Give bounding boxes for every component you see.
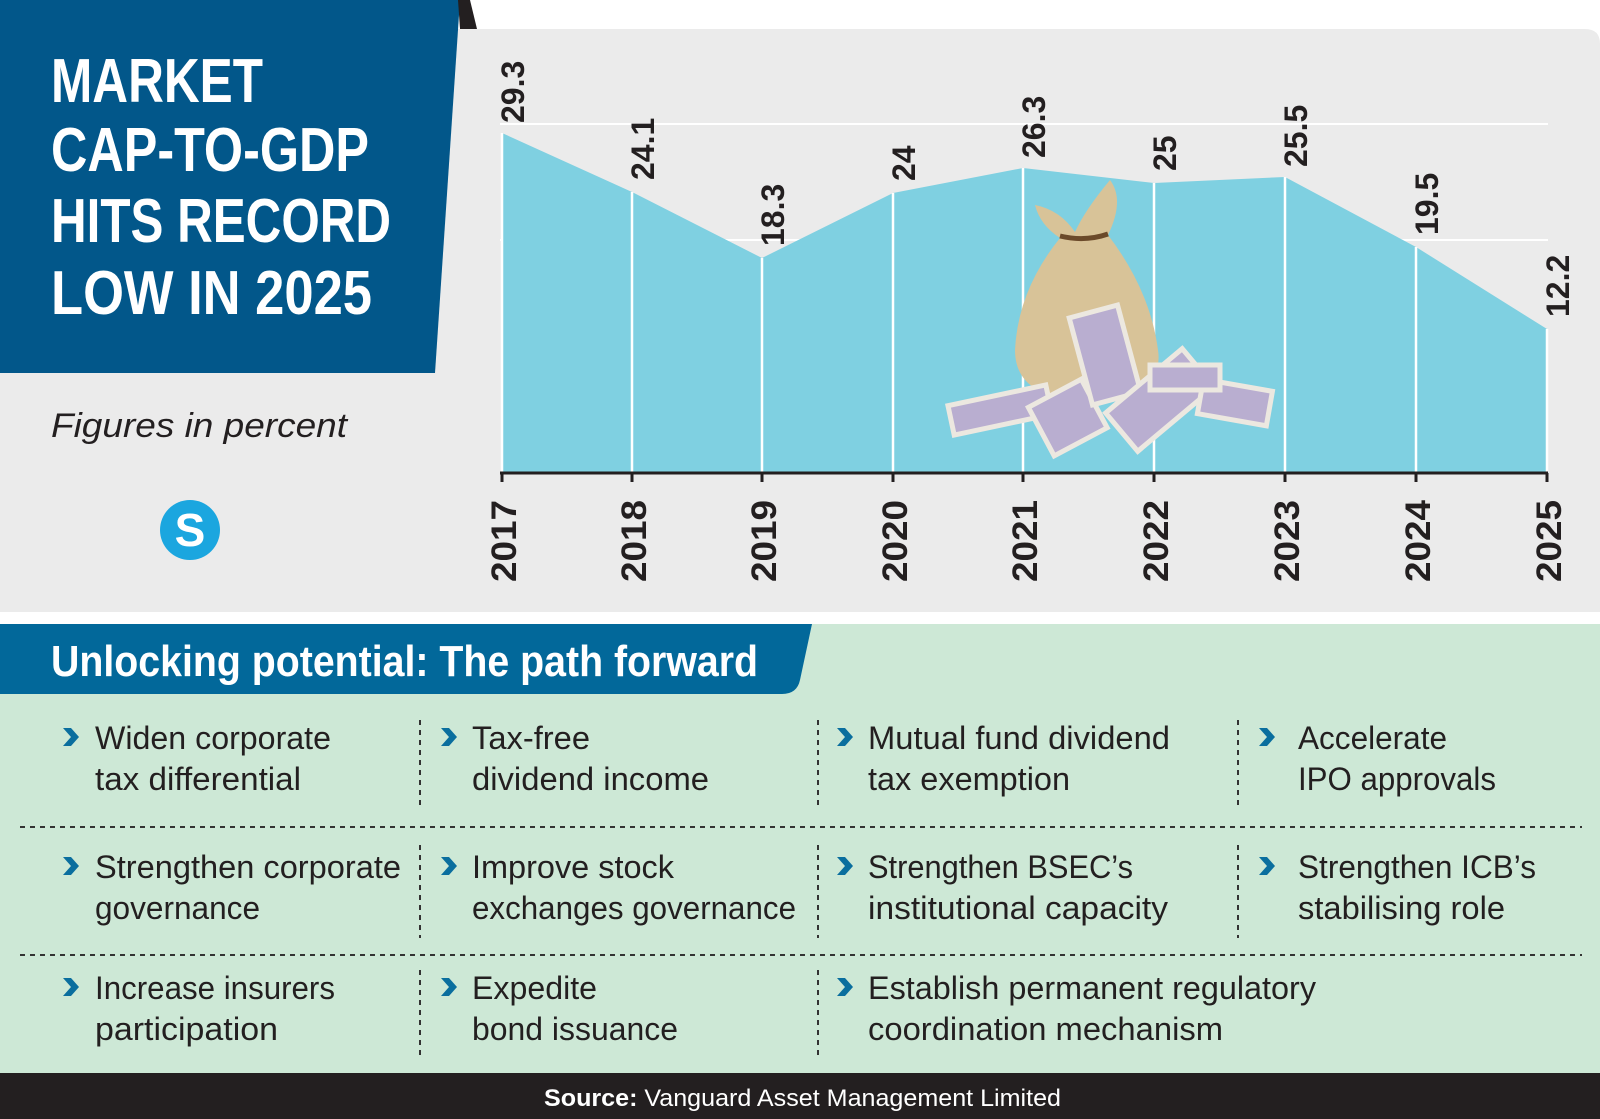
icon: logo [160,500,220,560]
recommendation items: tax exemption [868,761,1070,797]
title panel: CAP-TO-GDP [51,116,369,185]
subtitle: figures in percent: Figures in percent [51,407,349,445]
recommendation items: IPO approvals [1298,761,1496,797]
recommendation items: tax differential [95,761,301,797]
area chart: 2021 [1006,500,1045,582]
area chart: 24.1 [625,118,661,180]
footer: source [0,1073,1600,1119]
area chart: 25 [1147,135,1183,171]
area chart: 2020 [876,500,915,582]
recommendation items: Strengthen corporate [95,849,401,885]
icon: money bag [948,180,1272,456]
recommendation items: Increase insurers [95,970,335,1006]
recommendation items: governance [95,890,260,926]
area chart: 26.3 [1016,96,1052,158]
area chart: 2017 [485,500,524,582]
area chart: 2019 [745,500,784,582]
recommendation items: institutional capacity [868,890,1168,926]
chevrons [63,728,1275,996]
footer: source: Source: Vanguard Asset Management Limited [544,1085,1061,1112]
area chart: 18.3 [755,184,791,246]
recommendation items: bond issuance [472,1011,678,1047]
recommendation items [95,720,1536,1047]
title panel: MARKET [51,47,263,116]
area chart: 29.3 [495,61,531,123]
recommendation items: Tax-free [472,720,590,756]
title panel: LOW IN 2025 [51,259,372,328]
recommendation items: exchanges governance [472,890,796,926]
recommendation items: coordination mechanism [868,1011,1223,1047]
title panel [0,0,477,373]
recommendation items: dividend income [472,761,709,797]
panel: path forward [0,624,1600,1074]
icon: logo: S [175,504,205,556]
recommendation items: stabilising role [1298,890,1505,926]
area chart: 2022 [1137,500,1176,582]
recommendation items: Accelerate [1298,720,1447,756]
heading banner [0,624,812,694]
recommendation items: Expedite [472,970,597,1006]
heading banner: Unlocking potential: The path forward [51,637,758,686]
recommendation items: Strengthen ICB’s [1298,849,1536,885]
area chart: 24 [886,145,922,181]
recommendation items: Mutual fund dividend [868,720,1170,756]
area chart [485,61,1576,582]
area chart: 19.5 [1409,173,1445,235]
recommendation items: Widen corporate [95,720,331,756]
recommendation items: Improve stock [472,849,675,885]
recommendation items: Establish permanent regulatory [868,970,1316,1006]
gray top background [0,29,1600,612]
area chart: 2018 [615,500,654,582]
area chart: 2025 [1530,500,1569,582]
title panel: HITS RECORD [51,187,391,256]
recommendation items: Strengthen BSEC’s [868,849,1133,885]
area chart: 25.5 [1278,105,1314,167]
recommendation items: participation [95,1011,278,1047]
area chart: 12.2 [1540,255,1576,317]
area chart: 2023 [1268,500,1307,582]
area chart: 2024 [1399,499,1438,582]
